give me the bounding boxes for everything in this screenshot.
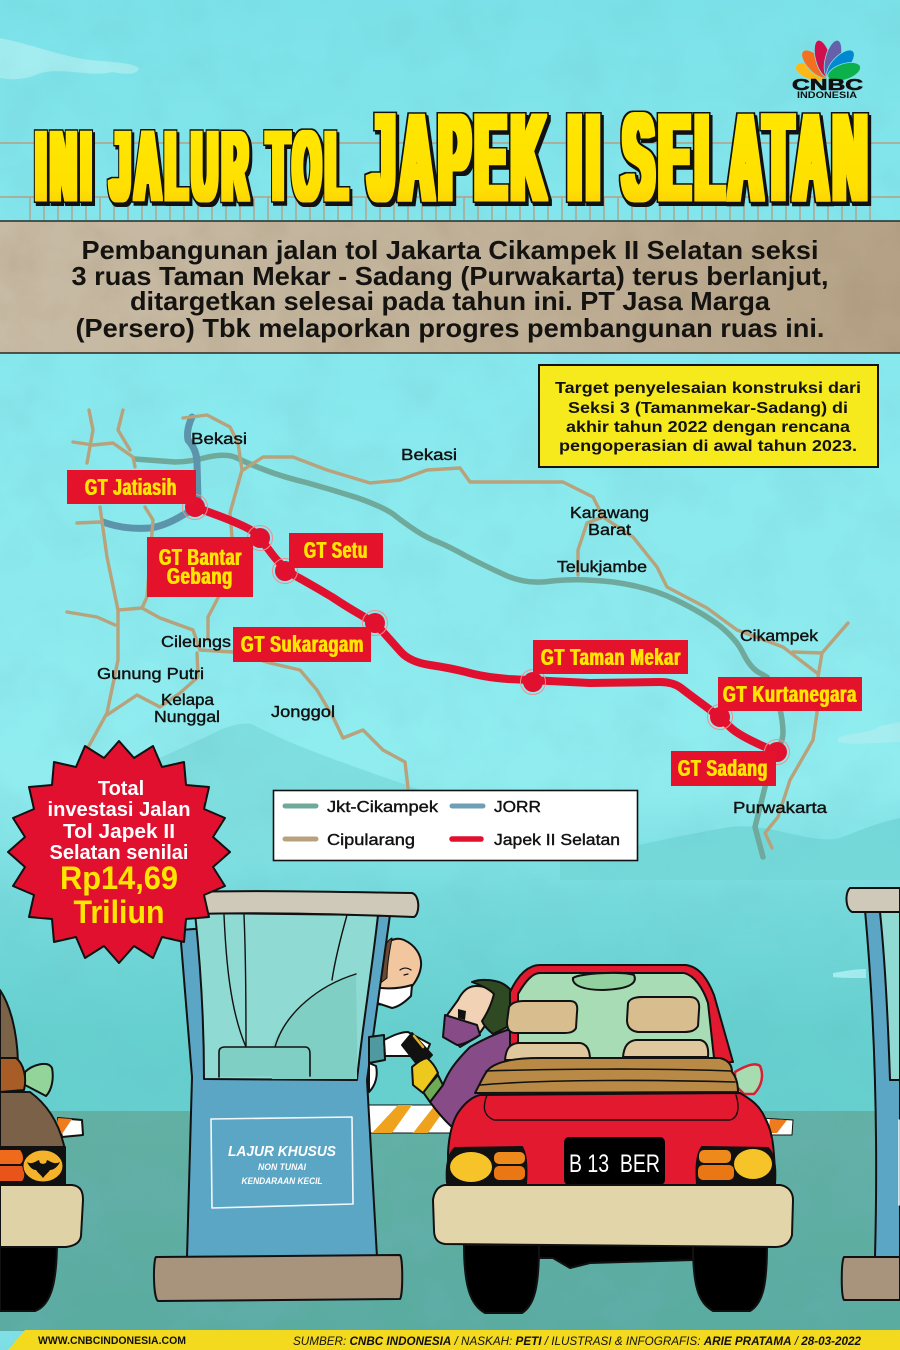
lane sign: LAJUR KHUSUS: [228, 1143, 336, 1160]
operator eye: [400, 968, 411, 975]
intro text: (Persero) Tbk melaporkan progres pembangunan ruas ini.: [76, 313, 825, 343]
place names: Jonggol: [271, 704, 335, 721]
cloud right: [838, 722, 900, 744]
place names: Bekasi: [191, 431, 247, 448]
left car wheel: [0, 1240, 57, 1311]
car body: [448, 1093, 775, 1190]
operator lower hand: [369, 1063, 377, 1092]
label: GT Bantar Gebang: Gebang: [167, 563, 233, 589]
left car barrier tip: [58, 1118, 83, 1137]
counter: [219, 1047, 310, 1077]
legend item: Cipularang: Cipularang: [327, 832, 415, 849]
callout: construction target: [539, 365, 878, 467]
right booth sign edge: [898, 1120, 900, 1205]
right booth body: [865, 910, 900, 1257]
investment starburst: Rp14,69: [60, 860, 178, 896]
lane sign: KENDARAAN KECIL: [242, 1176, 322, 1186]
right booth roof: [846, 888, 900, 912]
investment starburst: [8, 741, 230, 963]
booth window: [195, 913, 378, 1080]
intro text: [72, 235, 828, 343]
title guide lines: [0, 143, 900, 220]
callout: construction target: Seksi 3 (Tamanmekar-Sadang) di: [568, 400, 848, 417]
license plate: [564, 1137, 665, 1185]
place names: Barat: [588, 522, 632, 539]
callout: construction target: Target penyelesaian konstruksi dari: [555, 380, 861, 397]
label: GT Bantar Gebang: [147, 537, 253, 597]
toll gate markers: [182, 494, 790, 764]
label: GT Sukaragam: GT Sukaragam: [241, 631, 364, 657]
legend item: Japek II Selatan: Japek II Selatan: [494, 832, 620, 849]
car underside: [539, 1245, 693, 1268]
driver sunglasses: [458, 1009, 466, 1020]
label: GT Sadang: GT Sadang: [678, 755, 768, 781]
label: GT Kurtanegara: [718, 677, 862, 711]
right booth window: [880, 912, 900, 1080]
legend item: Jkt-Cikampek: Jkt-Cikampek: [327, 799, 439, 816]
cloud top left: [0, 38, 139, 79]
place names: Purwakarta: [733, 800, 827, 817]
car roof frame: [510, 965, 733, 1062]
investment starburst: investasi Jalan: [48, 799, 190, 821]
place names: Gunung Putri: [97, 666, 204, 683]
legend: [274, 790, 638, 860]
operator hair: [378, 938, 392, 985]
label: GT Jatiasih: GT Jatiasih: [85, 474, 177, 500]
booth body: [180, 915, 390, 1257]
operator mask: [374, 985, 412, 1008]
ground texture: [0, 1111, 900, 1331]
place names: Cileungs: [161, 634, 231, 651]
operator arm and card: [369, 1032, 432, 1092]
label: GT Taman Mekar: GT Taman Mekar: [541, 644, 681, 670]
driver glove: [412, 1058, 438, 1093]
investment starburst: Selatan senilai: [50, 842, 188, 864]
place names: Nunggal: [154, 709, 220, 726]
right tail light: [697, 1147, 775, 1184]
driver mask: [443, 1015, 480, 1045]
operator head: [372, 938, 421, 1008]
windshield: [518, 973, 714, 1058]
left seat: [505, 1043, 590, 1060]
red convertible car: [412, 965, 793, 1313]
side mirror: [735, 1064, 762, 1094]
folded roof: [475, 1058, 738, 1093]
investment starburst: Triliun: [74, 894, 164, 930]
label: GT Sadang: [671, 751, 776, 786]
place names: Kelapa: [161, 692, 214, 709]
CNBC Indonesia logo: CNBC: [792, 77, 864, 94]
left car mirror: [25, 1064, 53, 1096]
label: GT Jatiasih: [67, 470, 196, 504]
driver jacket: [430, 1030, 553, 1127]
place names: [97, 431, 827, 817]
cloud behind right booth: [833, 969, 866, 978]
left tail light: [447, 1147, 527, 1184]
legend item: JORR: JORR: [494, 799, 541, 816]
label: GT Taman Mekar: [533, 640, 688, 674]
label: GT Setu: GT Setu: [304, 537, 368, 563]
investment starburst: Tol Japek II: [63, 821, 175, 843]
road: Japek II Selatan: [195, 507, 777, 752]
lane sign: [211, 1117, 353, 1208]
road: Jkt-Cikampek: [135, 455, 783, 857]
label: GT Sukaragam: [233, 627, 371, 662]
road: Cipularang: [67, 410, 848, 848]
driver: [412, 980, 553, 1127]
driver hair: [472, 980, 517, 1034]
booth base: [154, 1255, 402, 1301]
booth roof: [190, 891, 418, 917]
rear view mirror: [573, 973, 635, 990]
left car body: [0, 1092, 65, 1190]
road: JORR: [103, 417, 198, 528]
toll booth: [154, 891, 418, 1301]
ground: [0, 1111, 900, 1331]
map: [67, 410, 862, 857]
right booth base: [842, 1257, 900, 1300]
callout: construction target: akhir tahun 2022 dengan rencana: [566, 419, 850, 436]
operator sleeve: [369, 1035, 385, 1063]
left car pillar: [0, 990, 18, 1062]
toll card: [402, 1033, 432, 1068]
operator glove: [384, 1032, 430, 1056]
investment starburst: Total: [98, 778, 144, 800]
right seat: [623, 1040, 708, 1057]
curtains: [224, 915, 246, 1047]
footer: [8, 1330, 900, 1350]
intro band: [0, 221, 900, 353]
place names: Telukjambe: [557, 559, 647, 576]
CNBC Indonesia logo: INDONESIA: [797, 90, 858, 100]
left car bumper: [0, 1185, 83, 1247]
intro text: 3 ruas Taman Mekar - Sadang (Purwakarta) terus berlanjut,: [72, 261, 828, 291]
icon: bat emblem: [27, 1160, 60, 1178]
footer credits: SUMBER: CNBC INDONESIA / NASKAH: PETI / ILUSTRASI & INFOGRAFIS: ARIE PRATAMA / 28-03-2022: [293, 1334, 861, 1348]
left car tail lights: [0, 1147, 65, 1185]
legend item: Cipularang: [285, 832, 415, 849]
barrier arm: [367, 1105, 793, 1135]
lane sign: NON TUNAI: [258, 1162, 306, 1172]
right mountain: [560, 818, 900, 880]
footer website: WWW.CNBCINDONESIA.COM: [38, 1335, 186, 1347]
operator silhouette in window: [272, 974, 357, 1079]
legend item: JORR: [452, 799, 541, 816]
place names: Cikampek: [740, 628, 819, 645]
intro text: Pembangunan jalan tol Jakarta Cikampek II Selatan seksi: [82, 235, 818, 265]
trunk crease: [484, 1095, 738, 1120]
right booth: [842, 888, 900, 1300]
place names: Bekasi: [401, 447, 457, 464]
title: INI JALUR TOL: [36, 111, 352, 221]
intro text: ditargetkan selesai pada tahun ini. PT Jasa Marga: [130, 286, 771, 316]
car bumper: [433, 1185, 793, 1247]
callout: construction target: pengoperasian di awal tahun 2023.: [559, 438, 857, 455]
CNBC Indonesia logo: [792, 38, 864, 100]
label: GT Bantar Gebang: GT Bantar: [159, 544, 242, 570]
place names: Karawang: [570, 505, 649, 522]
car wheels: [464, 1245, 539, 1313]
driver face: [445, 986, 494, 1047]
left car cover: [0, 1058, 25, 1092]
left mountain: [90, 724, 420, 860]
left car: [0, 990, 83, 1311]
driver cuff: [423, 1075, 443, 1102]
label: GT Setu: [289, 533, 383, 568]
license plate: B 13 BER: [569, 1150, 660, 1178]
